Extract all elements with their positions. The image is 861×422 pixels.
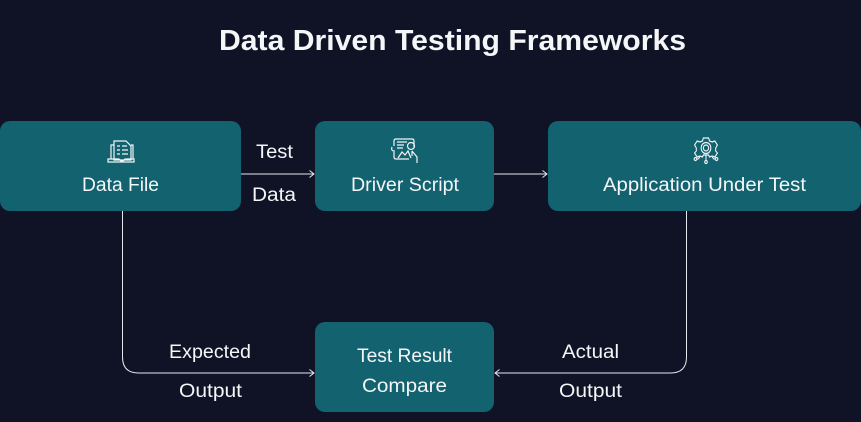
connector: Data File to Test Result Compare	[122, 210, 314, 376]
connector: Driver Script to Application Under Test	[494, 170, 547, 178]
label: Test: Test	[256, 142, 294, 163]
panel: Driver Script	[315, 121, 494, 211]
panel: Application Under Test	[548, 121, 861, 211]
icon: driver script report	[392, 139, 417, 163]
label: Compare: Compare	[362, 376, 447, 397]
label: Expected: Expected	[169, 342, 251, 363]
title: Data Driven Testing Frameworks	[219, 25, 686, 57]
panel: Test Result Compare	[315, 322, 494, 412]
label: Output left: Output	[179, 381, 243, 402]
connector: Data File to Driver Script	[240, 170, 314, 178]
icon: data file book	[108, 141, 134, 162]
icon: gear with circuit nodes	[694, 138, 718, 164]
label: Output right: Output	[559, 381, 623, 402]
label: Application Under Test: Application Under Test	[603, 175, 807, 196]
label: Data: Data	[252, 185, 296, 206]
panel: Data File	[0, 121, 241, 211]
label: Test Result: Test Result	[357, 346, 453, 367]
connector: Application Under Test to Test Result Compare	[495, 210, 686, 376]
label: Actual: Actual	[562, 342, 619, 363]
label: Data File: Data File	[82, 175, 159, 196]
label: Driver Script: Driver Script	[351, 175, 460, 196]
